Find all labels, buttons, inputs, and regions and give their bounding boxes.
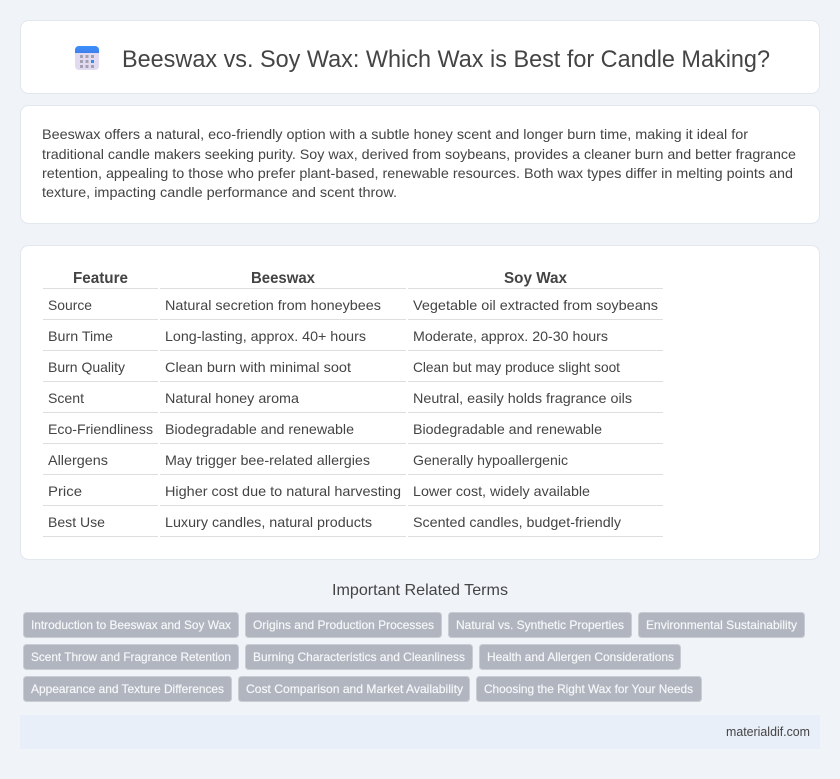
tag: Introduction to Beeswax and Soy Wax <box>31 618 231 632</box>
tag <box>246 612 442 638</box>
tag <box>24 676 232 702</box>
tag: Burning Characteristics and Cleanliness <box>253 650 465 664</box>
table row: source <box>48 297 658 313</box>
table row: allergens: May trigger bee-related allergies <box>165 452 370 468</box>
tag: Natural vs. Synthetic Properties <box>456 618 624 632</box>
table row: eco-friendliness: Eco-Friendliness <box>48 421 153 437</box>
panel: introduction <box>20 106 820 224</box>
tag <box>480 644 680 670</box>
tag <box>476 676 702 702</box>
table row: burn quality: Clean burn with minimal soot <box>165 359 351 375</box>
tag <box>24 644 238 670</box>
table row: best use <box>48 514 621 530</box>
title: Beeswax vs. Soy Wax: Which Wax is Best for Candle Making? <box>122 46 770 73</box>
tag: Choosing the Right Wax for Your Needs <box>484 682 693 696</box>
tag: Appearance and Texture Differences <box>31 682 224 696</box>
table row: price <box>48 483 590 499</box>
table row: burn quality <box>48 359 620 375</box>
table row: eco-friendliness: Biodegradable and renewable <box>165 421 354 437</box>
table row: eco-friendliness: Biodegradable and renewable <box>413 421 602 437</box>
text block: introduction: Beeswax offers a natural, eco-friendly option with a subtle honey scent and longer burn time, making it ideal for <box>42 126 748 142</box>
table row: burn quality: Clean but may produce slight soot <box>413 359 620 375</box>
tag: Scent Throw and Fragrance Retention <box>31 650 231 664</box>
footer source text: materialdif.com <box>726 725 810 739</box>
table row: burn time: Long-lasting, approx. 40+ hours <box>165 328 366 344</box>
panel: comparison table <box>20 246 820 560</box>
table row: best use: Luxury candles, natural products <box>165 514 372 530</box>
table row: price: Higher cost due to natural harvesting <box>165 483 401 499</box>
table row: burn quality: Burn Quality <box>48 359 125 375</box>
tag <box>448 612 632 638</box>
table row: scent: Neutral, easily holds fragrance oils <box>413 390 632 406</box>
text block: introduction: texture, impacting candle performance and scent throw. <box>42 184 397 200</box>
tag: Cost Comparison and Market Availability <box>246 682 463 696</box>
table header: Feature <box>73 270 128 287</box>
table header: Soy Wax <box>504 270 567 287</box>
tag <box>24 612 238 638</box>
text block: introduction: retention, appealing to those who prefer plant-based, renewable resources. Both wax types differ in melting points and <box>42 165 793 181</box>
tag: Health and Allergen Considerations <box>487 650 674 664</box>
table row: price: Price <box>48 483 82 499</box>
table row: scent: Natural honey aroma <box>165 390 299 406</box>
table row: best use: Scented candles, budget-friendly <box>413 514 621 530</box>
table row: best use: Best Use <box>48 514 105 530</box>
table row: eco-friendliness <box>48 421 602 437</box>
table row: source: Vegetable oil extracted from soybeans <box>413 297 658 313</box>
table row: source: Natural secretion from honeybees <box>165 297 381 313</box>
related term tags <box>24 612 804 702</box>
table header: Beeswax <box>251 270 315 287</box>
text block: introduction <box>42 126 796 200</box>
table row: burn time: Burn Time <box>48 328 113 344</box>
table row: burn time: Moderate, approx. 20-30 hours <box>413 328 608 344</box>
heading: related terms: Important Related Terms <box>332 582 508 599</box>
tag <box>246 644 472 670</box>
table row: source: Source <box>48 297 92 313</box>
table row: scent <box>48 390 632 406</box>
table row: scent: Scent <box>48 390 84 406</box>
footer <box>20 715 820 749</box>
tag: Origins and Production Processes <box>253 618 434 632</box>
tag: Environmental Sustainability <box>646 618 797 632</box>
text block: introduction: traditional candle makers seeking purity. Soy wax, derived from soybeans, provides a cleaner burn and better fragrance <box>42 146 796 162</box>
table row: allergens: Allergens <box>48 452 108 468</box>
table row: allergens: Generally hypoallergenic <box>413 452 568 468</box>
panel: header <box>20 20 820 94</box>
tag <box>238 676 470 702</box>
table header <box>73 270 567 287</box>
table row: burn time <box>48 328 608 344</box>
table row: allergens <box>48 452 568 468</box>
table row: price: Lower cost, widely available <box>413 483 590 499</box>
icon: calendar <box>75 46 99 70</box>
tag <box>638 612 804 638</box>
